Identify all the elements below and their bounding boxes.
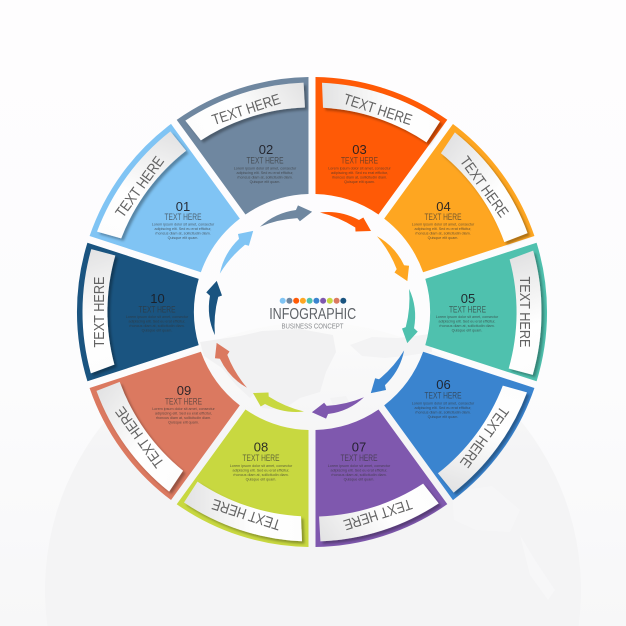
panel: segment 01: Quisque elit quam.	[168, 236, 198, 240]
panel: segment 08: 08	[254, 440, 268, 454]
panel: segment 05: rhoncus diam at, sollicitudin diam.	[439, 324, 495, 328]
panel: segment 02: TEXT HERE	[210, 91, 283, 129]
panel: segment 04: rhoncus diam at, sollicitudin diam.	[415, 232, 471, 236]
panel: segment 07	[260, 393, 447, 582]
panel: segment 10: rhoncus diam at, sollicitudin diam.	[129, 324, 185, 328]
panel: segment 10	[47, 213, 218, 381]
arrow 04	[366, 236, 419, 282]
arrow 01	[219, 225, 254, 280]
panel: segment 10: 10	[150, 291, 165, 306]
panel: segment 03: 03	[352, 142, 367, 157]
arrow 10	[199, 281, 233, 335]
panel: segment 05: TEXT HERE	[449, 304, 486, 314]
panel: segment 06	[363, 345, 534, 513]
panel: segment 04: Quisque elit quam.	[428, 236, 458, 240]
arrow 02	[260, 196, 312, 242]
panel: segment 03: Lorem ipsum dolor sit amet, consectur	[328, 166, 392, 170]
arrow 06	[370, 344, 405, 399]
panel: segment 04: 04	[436, 199, 451, 214]
panel: segment 03	[316, 77, 447, 214]
panel: segment 05: adipiscing elit. Sed eu erat efficitur,	[439, 320, 495, 324]
panel: segment 08: adipiscing elit. Sed eu erat efficitur,	[233, 468, 289, 472]
panel: segment 10: Lorem ipsum dolor sit amet, consectur	[126, 315, 189, 319]
panel: segment 02: 02	[259, 142, 273, 157]
panel: segment 01: TEXT HERE	[112, 153, 168, 221]
panel: segment 08: TEXT HERE	[210, 495, 283, 533]
panel: segment 09: rhoncus diam at, sollicitudin diam.	[156, 416, 211, 420]
panel: segment 05: TEXT HERE	[516, 276, 533, 348]
arrow 09	[205, 342, 258, 388]
panel: segment 03: TEXT HERE	[341, 156, 378, 166]
panel: segment 07: Quisque elit quam.	[344, 478, 374, 482]
panel: segment 04: Lorem ipsum dolor sit amet, consectur	[412, 222, 475, 226]
panel: segment 08: Quisque elit quam.	[246, 478, 276, 482]
arrow 07	[312, 382, 364, 428]
panel: segment 10: TEXT HERE	[91, 276, 108, 348]
panel: segment 05: Lorem ipsum dolor sit amet, consectur	[436, 315, 499, 319]
centre colour dots	[280, 298, 346, 304]
panel: segment 01	[90, 111, 261, 279]
title: INFOGRAPHIC	[269, 306, 356, 323]
panel: segment 10: Quisque elit quam.	[142, 328, 172, 332]
panel: segment 01: TEXT HERE	[164, 212, 202, 222]
panel: segment 08: rhoncus diam at, sollicitudin diam.	[233, 473, 289, 477]
panel: segment 04: adipiscing elit. Sed eu erat efficitur,	[415, 227, 471, 231]
panel: segment 06: Quisque elit quam.	[428, 415, 458, 419]
panel: segment 01: 01	[176, 199, 190, 214]
panel: segment 06: Lorem ipsum dolor sit amet, consectur	[412, 402, 475, 406]
panel: segment 01: adipiscing elit. Sed eu erat efficitur,	[155, 227, 211, 231]
panel: segment 07: adipiscing elit. Sed eu erat efficitur,	[331, 468, 387, 472]
panel: segment 07: TEXT HERE	[341, 495, 414, 533]
panel: segment 01: rhoncus diam at, sollicitudin diam.	[155, 232, 211, 236]
panel: segment 07: TEXT HERE	[340, 453, 378, 463]
panel: segment 03: adipiscing elit. Sed eu erat efficitur,	[331, 171, 388, 175]
panel: segment 09: 09	[177, 383, 191, 398]
panel: segment 08	[177, 410, 308, 547]
arrow 05	[391, 289, 425, 343]
cycle arrows	[199, 196, 425, 428]
panel: segment 03: rhoncus diam at, sollicitudin diam.	[332, 176, 387, 180]
panel: segment 08: TEXT HERE	[242, 453, 280, 463]
panel: segment 08: Lorem ipsum dolor sit amet, consectur	[230, 464, 293, 468]
panel: segment 02: Quisque elit quam.	[250, 180, 280, 184]
panel: segment 10: TEXT HERE	[138, 304, 176, 314]
panel: segment 09: Quisque elit quam.	[168, 420, 199, 424]
subtitle: BUSINESS CONCEPT	[282, 322, 344, 330]
panel: segment 06: rhoncus diam at, sollicitudin diam.	[415, 410, 471, 414]
panel: segment 02: rhoncus diam at, sollicitudin diam.	[237, 176, 293, 180]
panel: segment 03: Quisque elit quam.	[344, 180, 375, 184]
panel: segment 06: TEXT HERE	[456, 403, 512, 471]
panel: segment 02: TEXT HERE	[246, 156, 284, 166]
panel: segment 04	[372, 124, 560, 313]
panel: segment 07: rhoncus diam at, sollicitudin diam.	[331, 473, 387, 477]
panel: segment 04: TEXT HERE	[424, 212, 462, 222]
arrow 08	[253, 392, 304, 412]
panel: segment 09: Lorem ipsum dolor sit amet, consectur	[152, 407, 216, 411]
panel: segment 02: Lorem ipsum dolor sit amet, consectur	[234, 166, 297, 170]
panel: segment 05: 05	[461, 291, 475, 306]
panel: segment 09: TEXT HERE	[112, 403, 168, 471]
panel: segment 07: 07	[352, 440, 366, 454]
panel: segment 06: TEXT HERE	[424, 390, 462, 400]
arrow 03	[320, 212, 371, 232]
panel: segment 10: adipiscing elit. Sed eu erat efficitur,	[129, 320, 185, 324]
panel: segment 07: Lorem ipsum dolor sit amet, consectur	[328, 464, 391, 468]
panel: segment 06: 06	[436, 377, 451, 392]
panel: segment 02	[177, 42, 364, 231]
panel: segment 09: TEXT HERE	[165, 396, 202, 406]
panel: segment 01: Lorem ipsum dolor sit amet, consectur	[152, 222, 215, 226]
panel: segment 05	[406, 243, 577, 411]
panel: segment 06: adipiscing elit. Sed eu erat efficitur,	[415, 406, 471, 410]
panel: segment 04: TEXT HERE	[456, 153, 512, 221]
panel: segment 09: adipiscing elit. Sed eu erat efficitur,	[155, 412, 212, 416]
panel: segment 09	[64, 311, 252, 500]
panel: segment 05: Quisque elit quam.	[452, 328, 482, 332]
panel: segment 02: adipiscing elit. Sed eu erat efficitur,	[237, 171, 293, 175]
panel: segment 03: TEXT HERE	[341, 91, 414, 129]
world globe backdrop	[45, 322, 581, 626]
